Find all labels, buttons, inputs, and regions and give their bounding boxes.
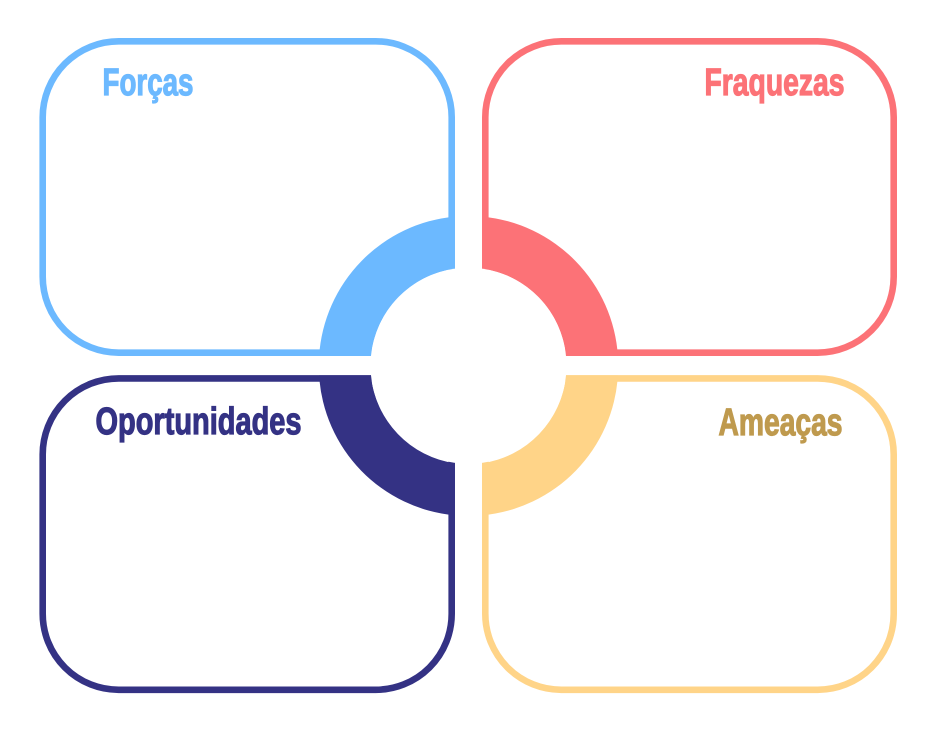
panel: Oportunidades <box>43 375 455 690</box>
quadrant arc: Forças <box>319 217 455 356</box>
panel: Fraquezas <box>482 41 894 356</box>
panel outline: Ameaças <box>485 378 894 690</box>
quadrant arc: Fraquezas <box>482 217 618 356</box>
panel: Forças <box>43 41 455 356</box>
quadrant arc: Ameaças <box>482 375 618 515</box>
heading: Ameaças: Ameaças <box>718 402 842 444</box>
panel outline: Forças <box>43 41 452 353</box>
heading: Fraquezas: Fraquezas <box>704 62 844 104</box>
heading: Oportunidades: Oportunidades <box>96 401 302 443</box>
quadrant arc: Oportunidades <box>319 375 455 515</box>
heading: Forças: Forças <box>102 62 194 104</box>
center circle <box>370 268 566 464</box>
panel: Ameaças <box>482 375 894 690</box>
panel outline: Fraquezas <box>485 41 894 353</box>
panel outline: Oportunidades <box>43 378 452 690</box>
